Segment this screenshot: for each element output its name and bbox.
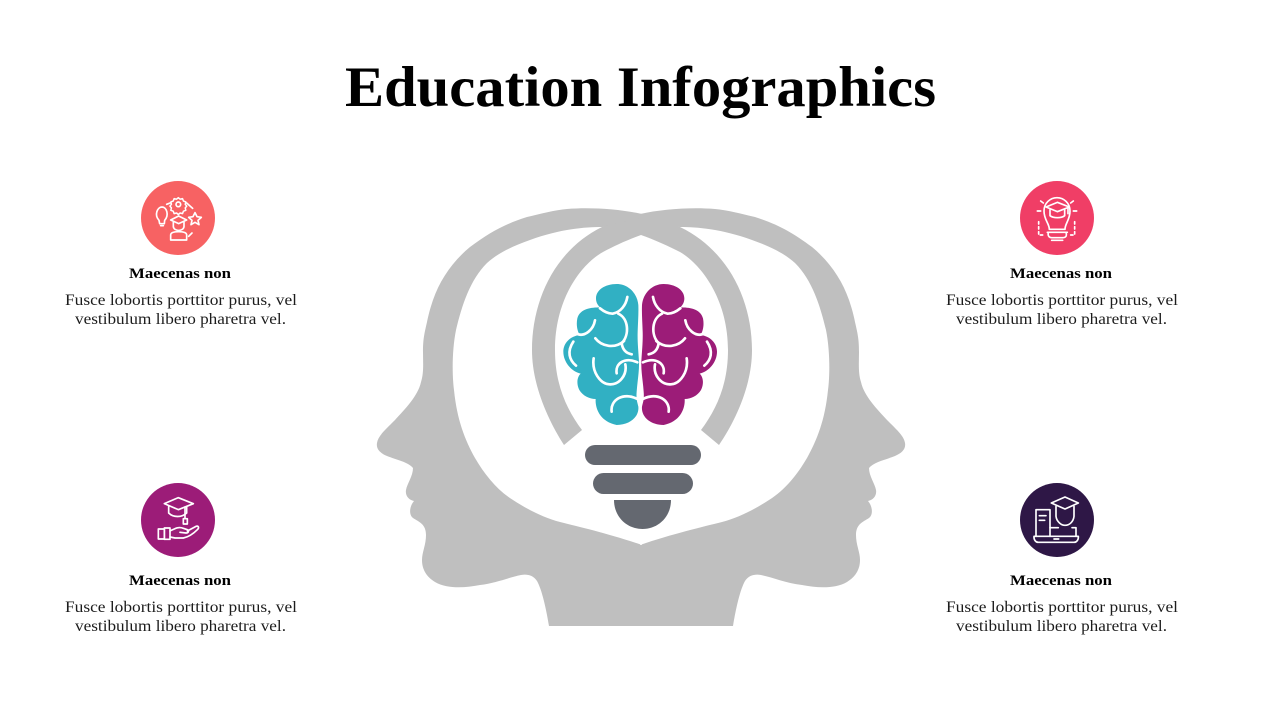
icon: hand holding graduation cap — [141, 483, 215, 557]
icon: light bulb with graduation cap — [1020, 181, 1094, 255]
title: Education Infographics — [345, 56, 936, 119]
brain left hemisphere — [563, 284, 639, 425]
icon: student with gear, bulb and star — [141, 181, 215, 255]
body text: Fusce lobortis porttitor purus, vel — [65, 292, 298, 309]
body text: vestibulum libero pharetra vel. — [956, 618, 1167, 635]
body text — [946, 292, 1179, 328]
head interior white left — [453, 225, 642, 545]
icon: laptop, book and graduate — [1020, 483, 1094, 557]
brain right hemisphere — [641, 284, 717, 425]
panel: top left — [65, 181, 298, 328]
bulb base bar 2 — [593, 473, 693, 494]
head interior white right — [640, 225, 829, 545]
bulb base cap — [614, 500, 671, 529]
central graphic: two heads with bulb and brain — [377, 208, 905, 626]
body text — [65, 292, 298, 328]
body text — [946, 599, 1179, 635]
head silhouette right — [640, 208, 905, 626]
bulb base bar 1 — [585, 445, 701, 465]
heading: Maecenas non — [1010, 266, 1113, 282]
bulb outline arc — [532, 218, 752, 445]
body text: vestibulum libero pharetra vel. — [75, 618, 286, 635]
body text: Fusce lobortis porttitor purus, vel — [65, 599, 298, 616]
panel: bottom left — [65, 483, 298, 635]
body text: Fusce lobortis porttitor purus, vel — [946, 292, 1179, 309]
body text — [65, 599, 298, 635]
heading: Maecenas non — [129, 266, 232, 282]
body text: Fusce lobortis porttitor purus, vel — [946, 599, 1179, 616]
heading: Maecenas non — [1010, 573, 1113, 589]
body text: vestibulum libero pharetra vel. — [956, 311, 1167, 328]
brain — [563, 284, 717, 425]
panel: bottom right — [946, 483, 1179, 635]
body text: vestibulum libero pharetra vel. — [75, 311, 286, 328]
head silhouette left — [377, 208, 642, 626]
panel: top right — [946, 181, 1179, 328]
heading: Maecenas non — [129, 573, 232, 589]
